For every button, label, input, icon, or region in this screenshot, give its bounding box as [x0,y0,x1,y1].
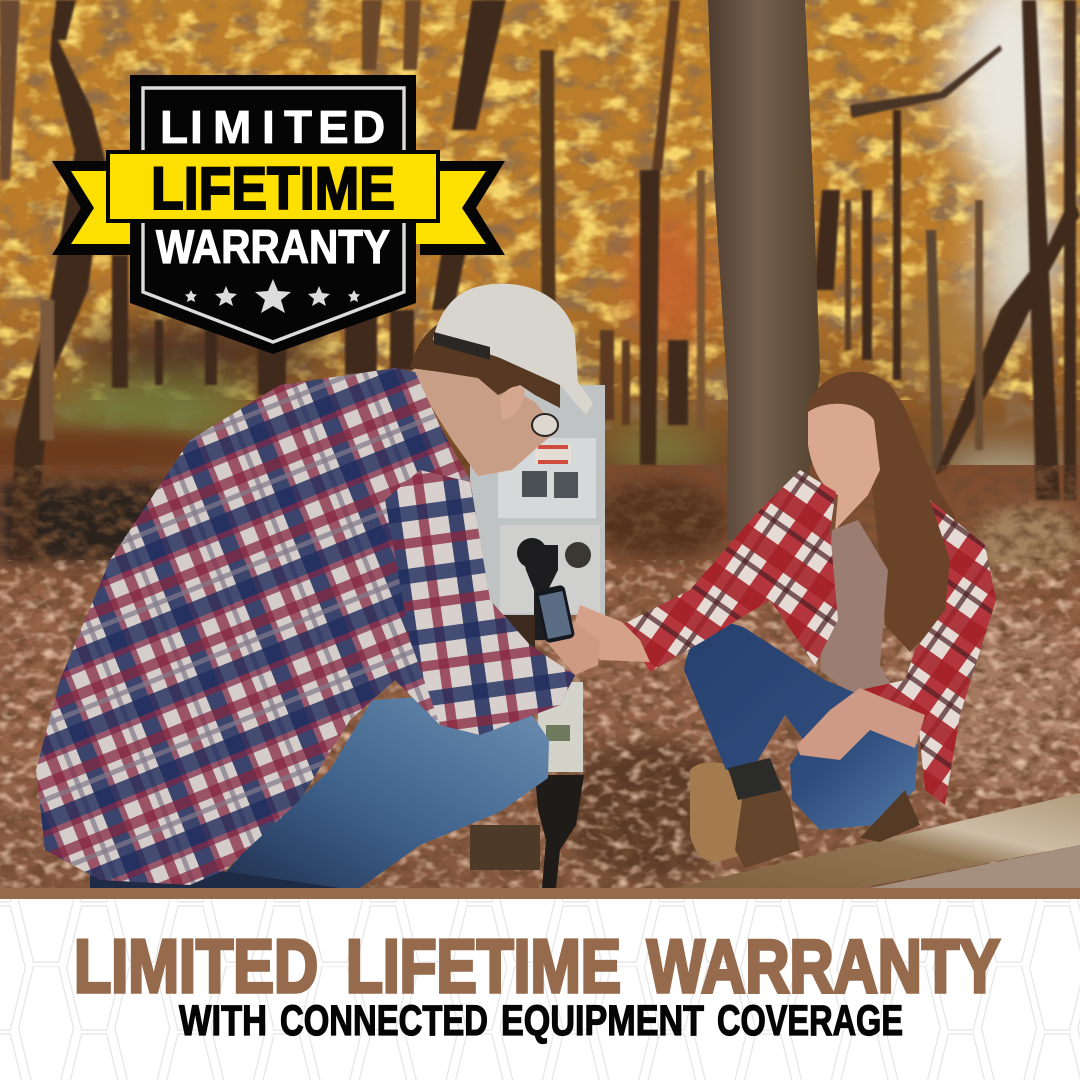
badge word: warranty: WARRANTY [156,221,390,274]
badge word: limited: LIMITED [160,101,385,153]
man sleeve [385,470,575,735]
man [36,284,600,888]
man hand [545,622,600,675]
woman boots [728,758,920,868]
sub heading: EQUIPMENT [501,997,704,1045]
man jeans [212,697,549,888]
woman face [808,404,880,530]
background tree trunks [0,0,1080,560]
main heading: LIMITED [74,924,318,1008]
large foreground tree [708,0,820,540]
stump [690,762,745,862]
badge word: lifetime: LIFETIME [151,155,395,222]
sub heading: WITH [179,997,267,1045]
brown divider band [0,888,1080,899]
wooden plank [675,793,1080,888]
woman plaid shirt [622,470,996,805]
cap strap [434,332,490,360]
man cap [433,284,593,415]
badge stars [185,279,360,313]
warranty badge [52,75,505,354]
woman arm and hand [797,688,925,760]
man plaid shirt [36,368,575,885]
gravel [870,845,1080,888]
woman hair back [806,372,963,652]
main heading: WARRANTY [647,924,1000,1008]
woman [575,372,996,868]
badge right ribbon tail [416,161,505,255]
woman jeans [684,623,918,830]
phone [539,585,574,643]
fallen leaf ground texture [0,465,1080,888]
man glasses [532,414,558,436]
controller and tripod [470,682,584,888]
man hair [410,324,560,408]
badge left ribbon tail [52,161,137,255]
light leaf speckle [0,560,1080,888]
man ear [500,386,525,420]
main heading: LIFETIME [346,924,621,1008]
badge yellow banner [106,150,440,223]
power pedestal [470,385,605,650]
man neck and face [411,368,558,476]
sub heading: CONNECTED [280,997,488,1045]
bottom caption panel [0,888,1080,1080]
sub heading: COVERAGE [717,997,903,1045]
badge shield [130,75,416,354]
woman top [820,520,890,692]
